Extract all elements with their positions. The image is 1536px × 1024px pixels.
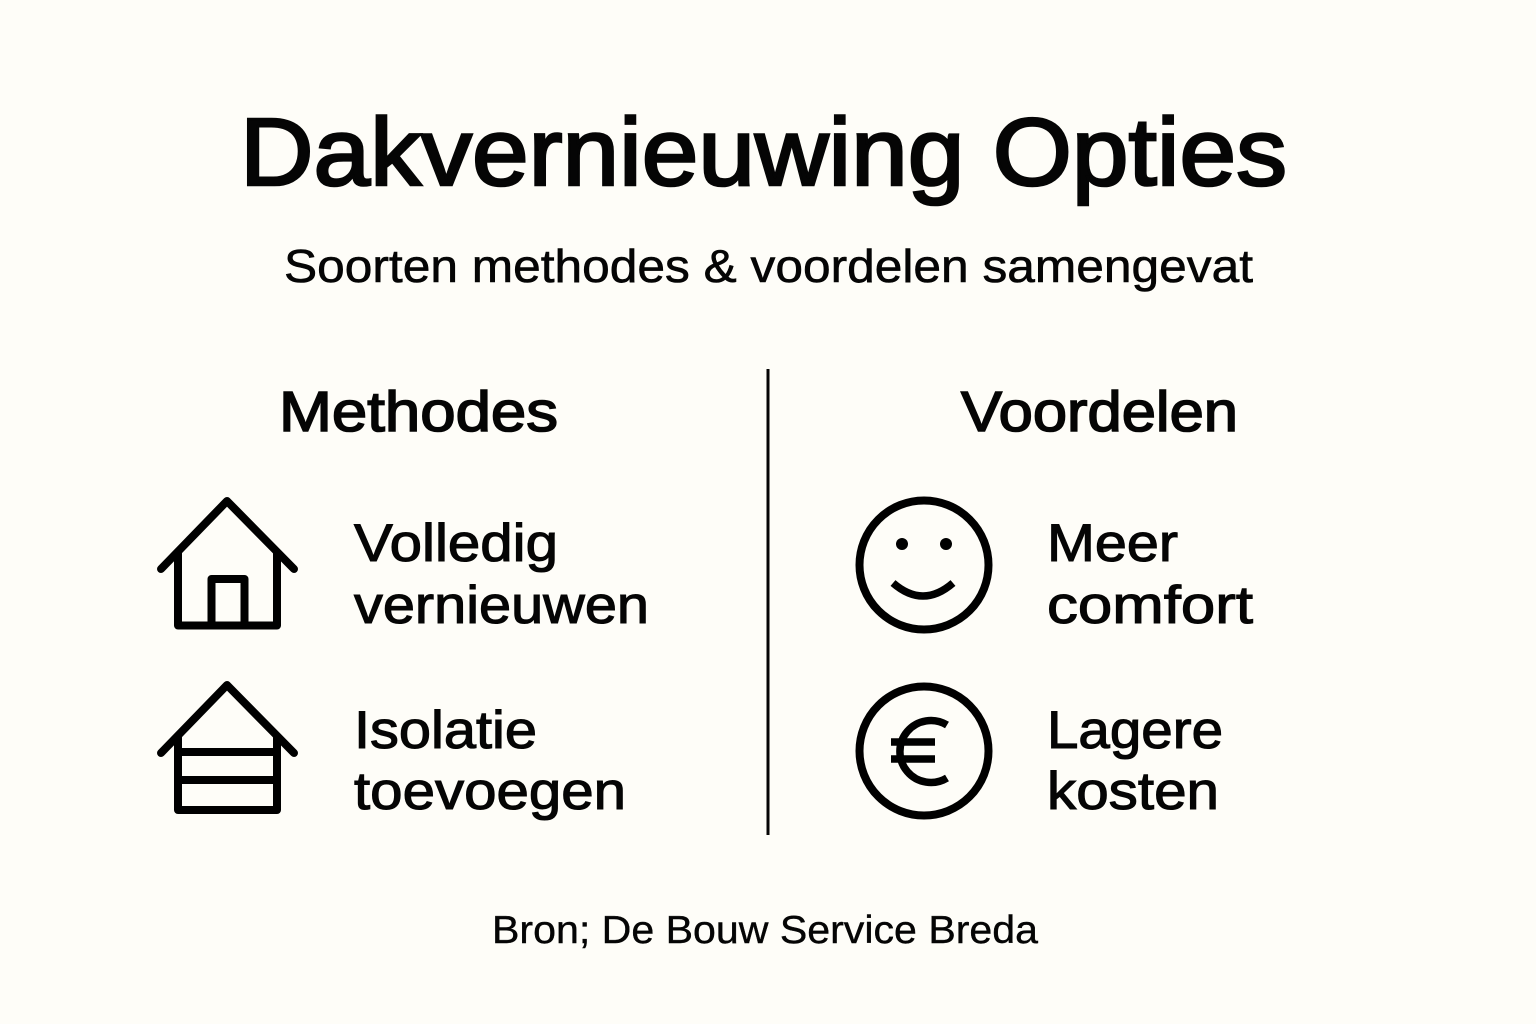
- text: meer comfort: comfort: [1047, 576, 1253, 635]
- text: isolatie toevoegen: [354, 701, 626, 821]
- text: volledig vernieuwen: [354, 514, 649, 635]
- icon: house with door: [161, 501, 294, 626]
- text: meer comfort: [1047, 514, 1253, 635]
- icon: house with insulation layers: [161, 685, 294, 810]
- text: lagere kosten: Lagere: [1047, 701, 1223, 760]
- text: isolatie toevoegen: toevoegen: [354, 762, 626, 821]
- text: lagere kosten: kosten: [1047, 762, 1219, 821]
- title: Dakvernieuwing Opties: [240, 99, 1287, 206]
- source note: Bron; De Bouw Service Breda: [492, 909, 1038, 952]
- heading: voordelen: Voordelen: [961, 380, 1238, 444]
- panel: voordelen: [860, 380, 1253, 821]
- subtitle: Soorten methodes & voordelen samengevat: [284, 240, 1253, 292]
- heading: methodes: Methodes: [279, 380, 558, 444]
- text: meer comfort: Meer: [1047, 514, 1178, 573]
- icon: euro coin: [860, 686, 988, 816]
- text: lagere kosten: [1047, 701, 1223, 821]
- text: isolatie toevoegen: Isolatie: [354, 701, 537, 760]
- icon: smiley: [860, 500, 988, 630]
- text: volledig vernieuwen: Volledig: [354, 514, 558, 573]
- divider: [766, 369, 770, 835]
- panel: methodes: [161, 380, 649, 821]
- text: volledig vernieuwen: vernieuwen: [354, 576, 649, 635]
